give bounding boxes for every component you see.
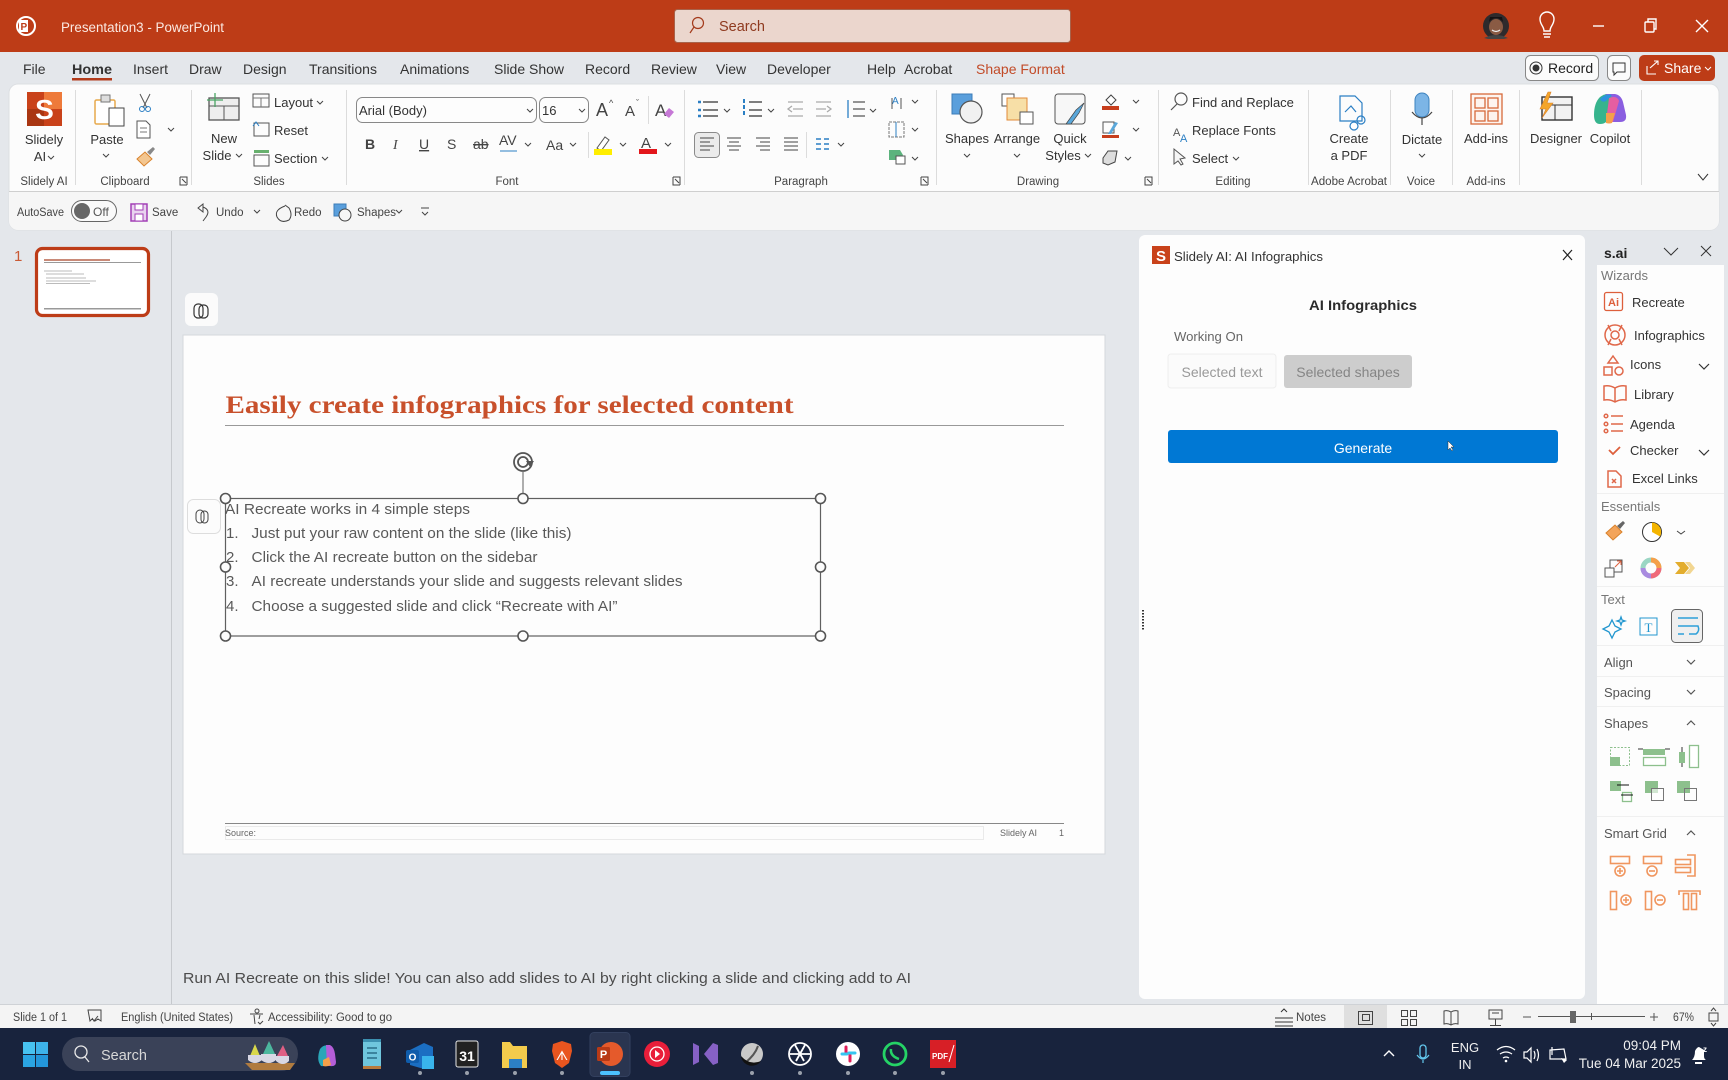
icon: shape fill: [1102, 95, 1139, 110]
icon: align options: [727, 138, 798, 150]
text: steps: Click the AI recreate button on the sidebar: [252, 549, 538, 566]
user avatar: [1483, 13, 1509, 39]
group: Font: I: [392, 138, 399, 153]
icon: shape effects: [1103, 151, 1131, 165]
align left selected: [694, 132, 720, 158]
icon: quick styles: [1055, 94, 1085, 124]
icon: Slidely logo: S: [35, 94, 54, 125]
icon: copilot: [1594, 94, 1626, 124]
group: Drawing: Shapes: [945, 131, 990, 146]
autosave toggle: Off: [93, 205, 109, 219]
text box with selection handles: [220, 453, 826, 641]
group: Font: A: [625, 103, 635, 120]
section: essentials: [1601, 499, 1695, 577]
text: steps: Choose a suggested slide and click “Recreate with AI”: [252, 598, 618, 615]
search box: [674, 10, 1070, 42]
icon: microphone: [1412, 93, 1432, 125]
window controls: [1593, 19, 1708, 32]
text: steps: [225, 501, 682, 615]
icon: section: [254, 150, 269, 166]
icon: colour wheel: [1643, 560, 1659, 576]
icon: text box: T: [1645, 620, 1653, 635]
search box: Search: [719, 19, 765, 35]
document title: Presentation3 - PowerPoint: [61, 20, 224, 35]
slide thumbnail: [36, 248, 148, 316]
group: Font: Aa: [546, 137, 563, 153]
ribbon collapse: [1698, 174, 1708, 180]
panel header: [1152, 246, 1572, 265]
group: Voice: Dictate: [1402, 132, 1442, 147]
group: Font: U: [419, 136, 429, 152]
panel: Slidely AI Infographics: Working On: [1174, 329, 1243, 344]
section: smart grid: Smart Grid: [1604, 826, 1667, 841]
group: Font: S: [447, 136, 456, 152]
thumbnail pane: 1: [14, 248, 22, 265]
section: wizards: Wizards: [1601, 268, 1648, 283]
icon: shapes: [334, 204, 351, 221]
group: Voice: [1402, 93, 1442, 188]
taskbar app icons: [318, 1032, 956, 1076]
ribbon tabs: Slide Show: [494, 61, 565, 77]
icon: reset: [253, 122, 269, 136]
taskbar app icons: PDF: [932, 1052, 948, 1061]
taskbar search: [62, 1037, 298, 1071]
copilot button: [185, 293, 218, 326]
icon: shapes: [1604, 356, 1623, 375]
group: Font: ab: [473, 136, 489, 152]
icon: cut: [140, 94, 150, 112]
status bar: [0, 1004, 1728, 1028]
record and share buttons: Share: [1664, 60, 1702, 76]
icon: agenda: [1604, 414, 1623, 433]
icon: highlight colour: [594, 137, 626, 155]
ribbon tabs: View: [716, 61, 747, 77]
icon: save: [131, 204, 147, 221]
title bar: [0, 0, 1728, 52]
system tray: ENG: [1451, 1040, 1479, 1055]
button: generate: Generate: [1334, 440, 1392, 456]
group: Slidely AI: [20, 92, 68, 188]
icon: paste: [95, 95, 124, 126]
ribbon tabs: Help: [867, 61, 896, 77]
ribbon tabs: Home: [72, 61, 112, 77]
cursor: [1448, 441, 1454, 451]
group: Adobe Acrobat: a PDF: [1331, 148, 1367, 163]
group: Slides: Layout: [274, 95, 313, 110]
group: Designer and Copilot: Designer: [1530, 131, 1583, 146]
font name box: [356, 98, 536, 122]
text: steps: 4.: [226, 598, 239, 615]
group: Font: [356, 98, 680, 188]
group: Clipboard: Clipboard: [100, 176, 150, 188]
icon: library: [1604, 386, 1626, 402]
text: steps: AI Recreate works in 4 simple steps: [225, 501, 470, 518]
icon: replace fonts: A: [1180, 133, 1188, 145]
group: Font: A: [655, 101, 667, 120]
accordion: spacing: [1604, 685, 1695, 700]
accordion: align: [1604, 655, 1695, 670]
group: Slidely AI: AI: [34, 149, 46, 164]
group: Designer and Copilot: [1530, 92, 1708, 180]
quick access toolbar: [17, 200, 429, 222]
copilot side button: [188, 500, 220, 534]
ribbon tabs: Transitions: [309, 61, 377, 77]
text: steps: 2.: [226, 549, 239, 566]
icon: layout: [253, 94, 269, 107]
panel heading: AI Infographics: [1309, 297, 1417, 313]
icon: PowerPoint logo: P: [20, 22, 28, 33]
quick access toolbar: AutoSave: [17, 207, 64, 219]
group: Drawing: Quick: [1053, 131, 1087, 146]
group: Adobe Acrobat: Adobe Acrobat: [1311, 176, 1388, 188]
button: selected text: Selected text: [1182, 364, 1263, 380]
group: Drawing: Arrange: [994, 131, 1040, 146]
ribbon tabs: Record: [585, 61, 630, 77]
icon: spell check: [88, 1010, 101, 1021]
icon: font colour: A: [641, 135, 651, 152]
group: Add-ins: Add-ins: [1464, 131, 1509, 146]
group: Slides: Slides: [253, 176, 285, 188]
section: wizards: Checker: [1630, 443, 1679, 458]
group: Adobe Acrobat: [1311, 96, 1388, 188]
sidebar: s.ai: [1597, 245, 1724, 1005]
taskbar app icons: 31: [459, 1048, 475, 1064]
shape tool icons: [1610, 746, 1698, 802]
group: Editing: Select: [1192, 151, 1229, 166]
icon: recreate: Ai: [1608, 297, 1619, 309]
system tray: IN: [1458, 1057, 1472, 1072]
icon: text direction: [892, 96, 918, 109]
ribbon tabs: Acrobat: [904, 61, 952, 77]
accordion: spacing: Spacing: [1604, 685, 1651, 700]
group: Slides: Slide: [203, 148, 231, 163]
icon: copy: [137, 121, 174, 138]
group: Drawing: Drawing: [1017, 176, 1059, 188]
group: Font: ^: [609, 98, 614, 108]
rotate handle: [514, 453, 534, 498]
icon: PowerPoint logo: [17, 17, 35, 35]
group: Drawing: [945, 94, 1152, 188]
quick access toolbar: Redo: [294, 207, 322, 219]
section: text: Text: [1601, 592, 1625, 607]
button: generate: [1168, 430, 1558, 463]
view buttons: [1344, 1005, 1502, 1028]
slide footer: 1: [1059, 828, 1064, 838]
group: Add-ins: [1464, 94, 1509, 188]
status bar: Accessibility: Good to go: [268, 1012, 392, 1024]
group: Slidely AI: Slidely: [25, 132, 64, 147]
font size box: 16: [542, 103, 556, 118]
icon: new slide: [207, 93, 239, 120]
quick access toolbar: Undo: [216, 207, 244, 219]
zoom slider: 67%: [1673, 1012, 1694, 1024]
icon: bullets: [698, 102, 730, 116]
icon: create PDF: [1340, 96, 1365, 130]
sizing handles: [220, 494, 826, 641]
system tray: Tue 04 Mar 2025: [1579, 1056, 1681, 1071]
section: wizards: Infographics: [1634, 328, 1705, 343]
icon: arrange: [1002, 94, 1033, 124]
quick access toolbar: Shapes: [357, 207, 396, 219]
icon: resize: [1605, 560, 1622, 577]
icon: infographics: [1605, 325, 1625, 345]
taskbar app icons: P: [600, 1049, 607, 1061]
icon: redo: [276, 205, 291, 221]
icon: align text: [889, 122, 918, 137]
slide footer: Source:: [225, 828, 256, 838]
font name box: Arial (Body): [359, 103, 427, 118]
group: Paragraph: Paragraph: [774, 176, 828, 188]
icon: lightbulb: [1540, 12, 1554, 37]
group: Clipboard: Paste: [90, 132, 124, 147]
slide footer: Slidely AI: [1000, 828, 1037, 838]
section: wizards: Icons: [1630, 357, 1662, 372]
taskbar search: Search: [101, 1048, 147, 1064]
icon: line spacing: [848, 100, 876, 118]
slide footer: [225, 824, 1064, 840]
icon: columns: [816, 139, 844, 149]
status bar: Slide 1 of 1: [13, 1012, 67, 1024]
icon: indents: [788, 102, 831, 116]
record and share buttons: [1526, 55, 1715, 81]
sidebar: s.ai: s.ai: [1604, 245, 1627, 261]
notes toggle: Notes: [1296, 1012, 1326, 1024]
smart grid icons: [1610, 855, 1700, 910]
panel header: S: [1156, 248, 1166, 265]
group: Paragraph: [694, 96, 928, 188]
group: Slides: New: [211, 131, 238, 146]
ribbon tabs: Review: [651, 61, 698, 77]
section: wizards: Recreate: [1632, 295, 1685, 310]
text: steps: 1.: [226, 525, 239, 542]
icon: checker: [1609, 447, 1620, 454]
button: selected shapes: [1284, 355, 1412, 388]
group: Drawing: Styles: [1045, 148, 1081, 163]
panel header: Slidely AI: AI Infographics: [1174, 249, 1323, 264]
icon: accessibility: [250, 1009, 263, 1024]
font size box: [540, 98, 588, 122]
section: essentials: Essentials: [1601, 499, 1661, 514]
group: Font: A: [596, 100, 608, 120]
section: shapes: [1604, 716, 1698, 802]
taskbar app icons: ᗑ: [556, 1048, 568, 1063]
button: selected text: [1168, 354, 1276, 388]
section: wizards: [1601, 268, 1709, 487]
slide title: Easily create infographics for selected content: [226, 392, 794, 419]
group: Slidely AI: Slidely AI: [20, 176, 68, 188]
group: Add-ins: Add-ins: [1466, 176, 1506, 188]
text: steps: AI recreate understands your slide and suggests relevant slides: [252, 573, 682, 590]
ribbon tabs: Animations: [400, 61, 469, 77]
speaker notes: Run AI Recreate on this slide! You can also add slides to AI by right clicking a slide and clicking add to AI: [183, 970, 911, 987]
group: Font: AV: [499, 132, 517, 148]
icon: select: [1174, 149, 1185, 165]
icon: SmartArt: [889, 150, 918, 164]
icon: numbering: [744, 99, 774, 116]
ribbon tabs: Developer: [767, 61, 831, 77]
system tray: z: [1703, 1045, 1707, 1054]
group: Editing: [1171, 93, 1294, 188]
slide canvas: [183, 335, 1105, 854]
panel: Slidely AI Infographics: [1139, 235, 1585, 999]
group: Font: ˇ: [636, 98, 639, 108]
running app dots: [418, 1071, 945, 1075]
notes toggle: [1275, 1009, 1326, 1026]
icon: recreate: [1604, 292, 1622, 310]
autosave toggle: [72, 200, 116, 222]
group: Voice: Voice: [1407, 176, 1435, 188]
group: Slides: Section: [274, 151, 317, 166]
thumbnail pane: [14, 231, 218, 1005]
icon: chevrons: [1675, 562, 1695, 574]
icon: shape outline: [1102, 122, 1139, 138]
record and share buttons: Record: [1548, 60, 1593, 76]
status bar: English (United States): [121, 1012, 233, 1024]
group: Clipboard: [90, 94, 187, 188]
icon: font colour: [639, 135, 671, 154]
text: steps: Just put your raw content on the slide (like this): [252, 525, 572, 542]
icon: excel links: [1608, 471, 1621, 487]
icon: replace fonts: [1173, 127, 1188, 145]
ribbon tabs: File: [23, 61, 46, 77]
group: Designer and Copilot: Copilot: [1590, 131, 1631, 146]
icon: pie: [1642, 522, 1685, 542]
group: Editing: Find and Replace: [1192, 95, 1294, 110]
section: text: [1601, 592, 1702, 642]
ribbon tabs: Design: [243, 61, 287, 77]
section: wizards: Agenda: [1630, 417, 1676, 432]
ribbon panel: [9, 84, 1719, 230]
icon: find: [1171, 93, 1187, 110]
customise toolbar: [421, 208, 429, 215]
icon: text direction: A: [892, 96, 899, 107]
ribbon tabs: Draw: [189, 61, 223, 77]
icon: undo: [198, 204, 208, 221]
taskbar app icons: O: [409, 1052, 417, 1064]
section: smart grid: [1604, 826, 1700, 910]
text: steps: 3.: [226, 573, 239, 590]
zoom slider: [1523, 1008, 1718, 1026]
group: Editing: Replace Fonts: [1192, 123, 1276, 138]
section: wizards: Library: [1634, 387, 1674, 402]
group: Editing: Editing: [1215, 176, 1251, 188]
icon: replace fonts: A: [1173, 127, 1181, 139]
icon: shapes: [952, 94, 982, 123]
ribbon tabs: [23, 61, 1065, 80]
icon: windows start: [23, 1042, 48, 1067]
group: Slides: Reset: [274, 123, 308, 138]
icon: wrap text selected: [1672, 610, 1702, 642]
system tray: 09:04 PM: [1623, 1038, 1681, 1053]
icon: format painter: [137, 147, 155, 166]
ribbon tabs: Insert: [133, 61, 168, 77]
button: selected shapes: Selected shapes: [1296, 364, 1400, 380]
icon: sparkle: [1603, 617, 1625, 638]
section: wizards: Excel Links: [1632, 471, 1698, 486]
icon: designer: [1540, 92, 1572, 120]
system tray: [1384, 1038, 1707, 1072]
panel splitter: [1142, 610, 1144, 630]
section: shapes: Shapes: [1604, 716, 1649, 731]
icon: add-ins: [1471, 94, 1502, 124]
quick access toolbar: Save: [152, 207, 178, 219]
ribbon tabs: Shape Format: [976, 61, 1065, 77]
group: Slides: [203, 93, 328, 188]
accordion: align: Align: [1604, 655, 1633, 670]
icon: format painter: [1606, 521, 1625, 540]
group: Adobe Acrobat: Create: [1329, 131, 1369, 146]
group: Font: B: [365, 136, 375, 152]
group: Font: Font: [495, 176, 519, 188]
taskbar: [0, 1028, 1728, 1080]
